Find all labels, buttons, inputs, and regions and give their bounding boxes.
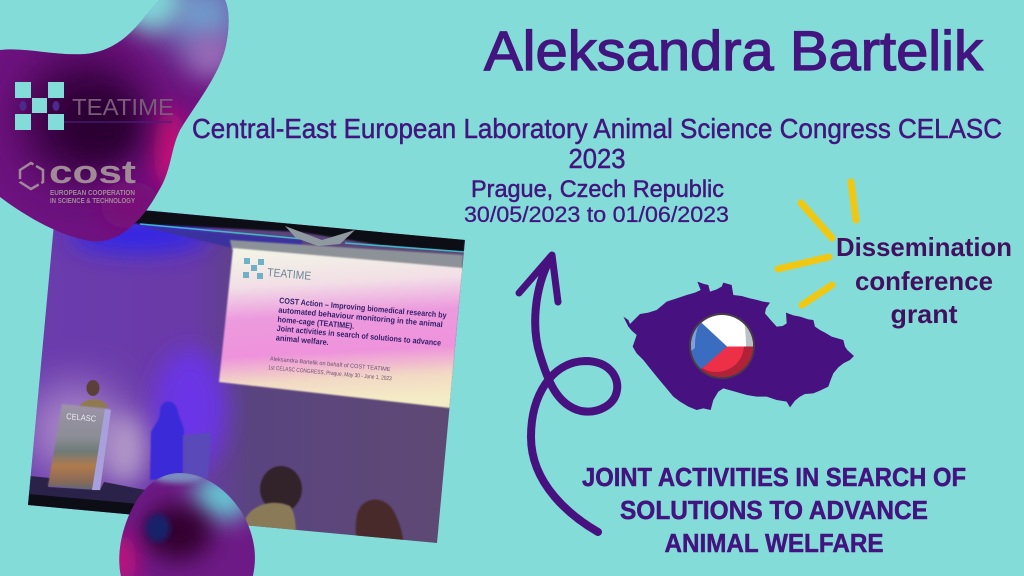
speaker: [79, 380, 108, 408]
audience heads: [245, 465, 404, 540]
grant label: [836, 232, 1012, 329]
logo: COST: EUROPEAN COOPERATION: [50, 190, 135, 197]
lectern shadow: [183, 433, 211, 480]
blob: bottom: [119, 473, 255, 576]
conference photo: [28, 210, 465, 543]
screen text: Joint activities in search of solutions to advance: [276, 324, 442, 348]
grant label: conference: [855, 266, 993, 296]
logo: COST: [20, 154, 136, 205]
logo: TEATIME: [15, 82, 174, 130]
title: Aleksandra Bartelik: [484, 19, 984, 82]
icon: Czech flag badge: [689, 312, 755, 380]
speaker shadow: [150, 402, 184, 480]
conference name: 2023: [568, 143, 626, 174]
screen text: home-cage (TEATIME).: [277, 315, 355, 331]
location: Prague, Czech Republic: [471, 176, 724, 203]
dates: 30/05/2023 to 01/06/2023: [464, 202, 729, 227]
stage platform: [28, 476, 145, 504]
map: Czech Republic: [623, 282, 854, 410]
call to action text: ANIMAL WELFARE: [664, 528, 884, 558]
conference name: [192, 113, 1002, 174]
icon: yellow emphasis rays: [778, 182, 856, 305]
blob: top left with logos: [0, 0, 229, 242]
screen text: [268, 296, 447, 387]
lectern: [48, 404, 111, 490]
screen logo: [243, 258, 264, 279]
projection screen: [219, 248, 463, 408]
call to action text: [582, 462, 966, 558]
stage floor: [28, 492, 135, 514]
arrow: curly arrow pointing to event details: [519, 255, 617, 532]
logo: TEATIME: TEATIME: [72, 94, 174, 120]
call to action text: SOLUTIONS TO ADVANCE: [620, 495, 928, 525]
lectern: CELASC: [66, 411, 97, 424]
logo: COST: cost: [49, 154, 136, 190]
screen text: Aleksandra Bartelik on behalf of COST TEATIME: [270, 356, 391, 373]
ceiling: [134, 210, 465, 268]
screen text: COST Action – Improving biomedical research by: [279, 296, 447, 320]
grant label: Dissemination: [836, 232, 1012, 262]
screen text: automated behaviour monitoring in the animal: [278, 305, 443, 329]
grant label: grant: [890, 299, 958, 329]
screen logo wordmark: TEATIME: [267, 267, 312, 283]
screen text: animal welfare.: [275, 333, 329, 347]
call to action text: JOINT ACTIVITIES IN SEARCH OF: [582, 462, 966, 492]
logo: COST: IN SCIENCE & TECHNOLOGY: [50, 198, 135, 205]
screen text: 1st CELASC CONGRESS, Prague, May 30 - June 1, 2023: [268, 365, 392, 382]
